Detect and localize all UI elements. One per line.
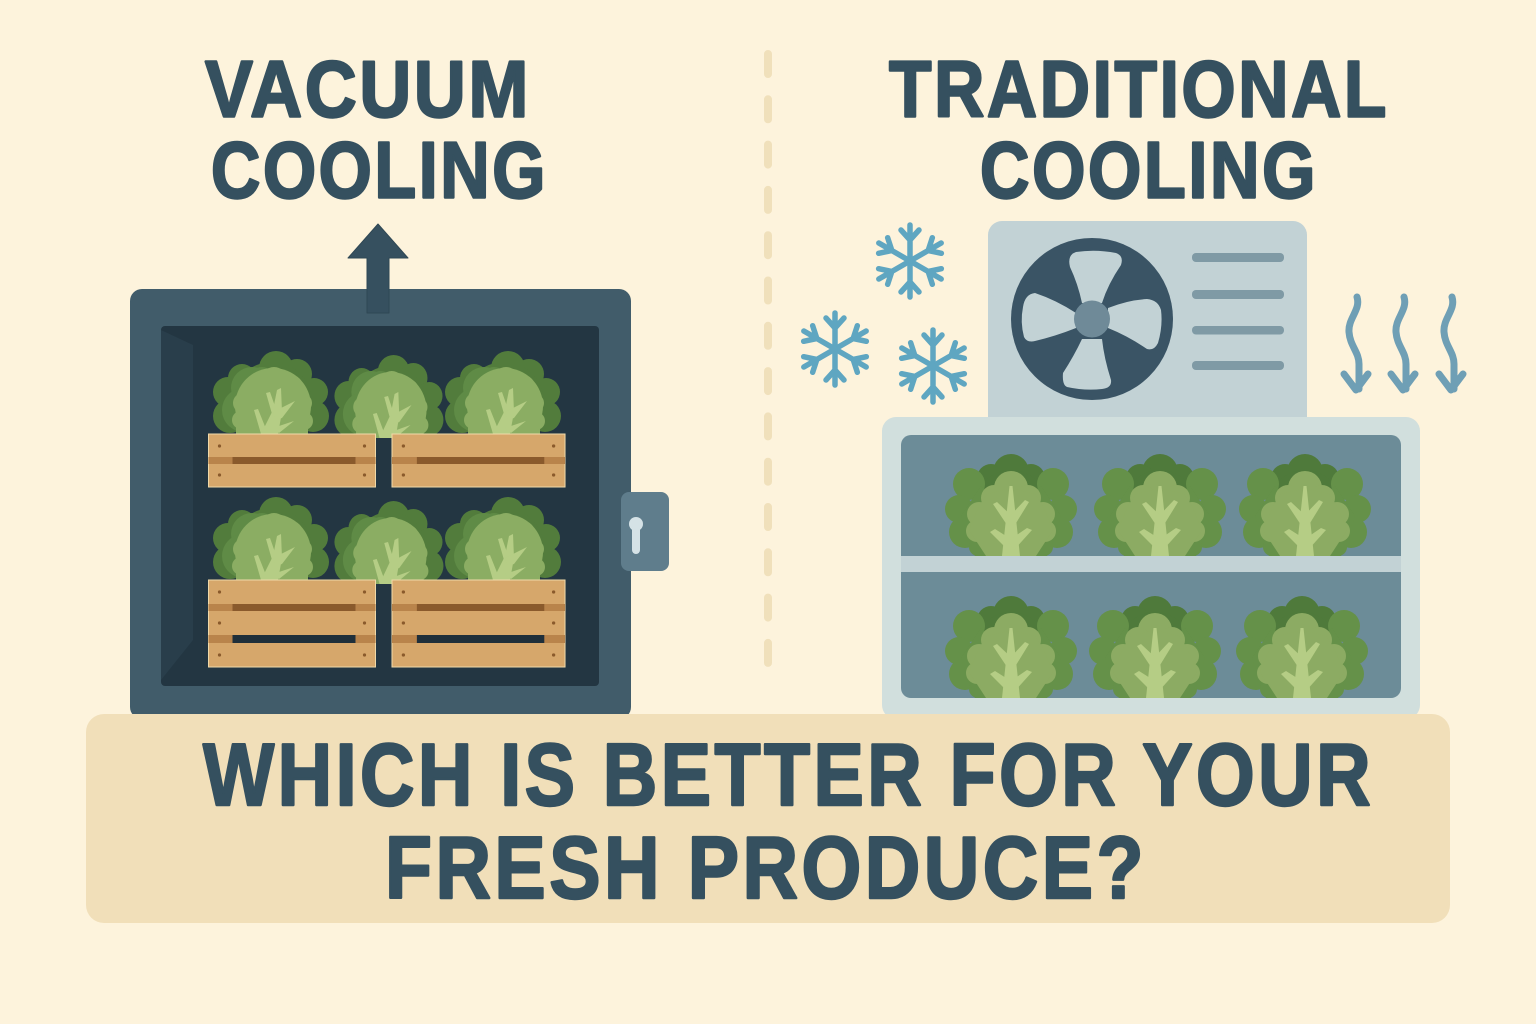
chamber door latch xyxy=(621,492,669,571)
lower shelf lettuce xyxy=(945,596,1368,698)
heading: vacuum cooling: VACUUM xyxy=(205,44,531,134)
icon: upward vacuum arrow xyxy=(348,224,408,313)
heading: traditional cooling xyxy=(889,44,1389,214)
lower row of lettuce in crates xyxy=(208,497,565,668)
upper shelf lettuce xyxy=(945,454,1371,556)
heading: traditional cooling: COOLING xyxy=(980,126,1318,214)
icon: cold air arrows xyxy=(1344,297,1463,390)
heading: traditional cooling: TRADITIONAL xyxy=(889,44,1389,134)
banner question: FRESH PRODUCE? xyxy=(385,818,1147,917)
icon: fan xyxy=(1011,238,1173,400)
air conditioning unit xyxy=(988,221,1307,436)
heading: vacuum cooling xyxy=(205,44,548,214)
upper row of lettuce in crates xyxy=(208,351,565,488)
heading: vacuum cooling: COOLING xyxy=(211,126,548,214)
vent slats xyxy=(1192,253,1284,370)
icon: snowflakes xyxy=(799,225,969,402)
banner question: WHICH IS BETTER FOR YOUR xyxy=(203,725,1374,824)
refrigerated cabinet xyxy=(882,417,1420,719)
banner xyxy=(86,714,1450,923)
banner question xyxy=(203,725,1374,917)
vacuum chamber xyxy=(130,224,669,719)
